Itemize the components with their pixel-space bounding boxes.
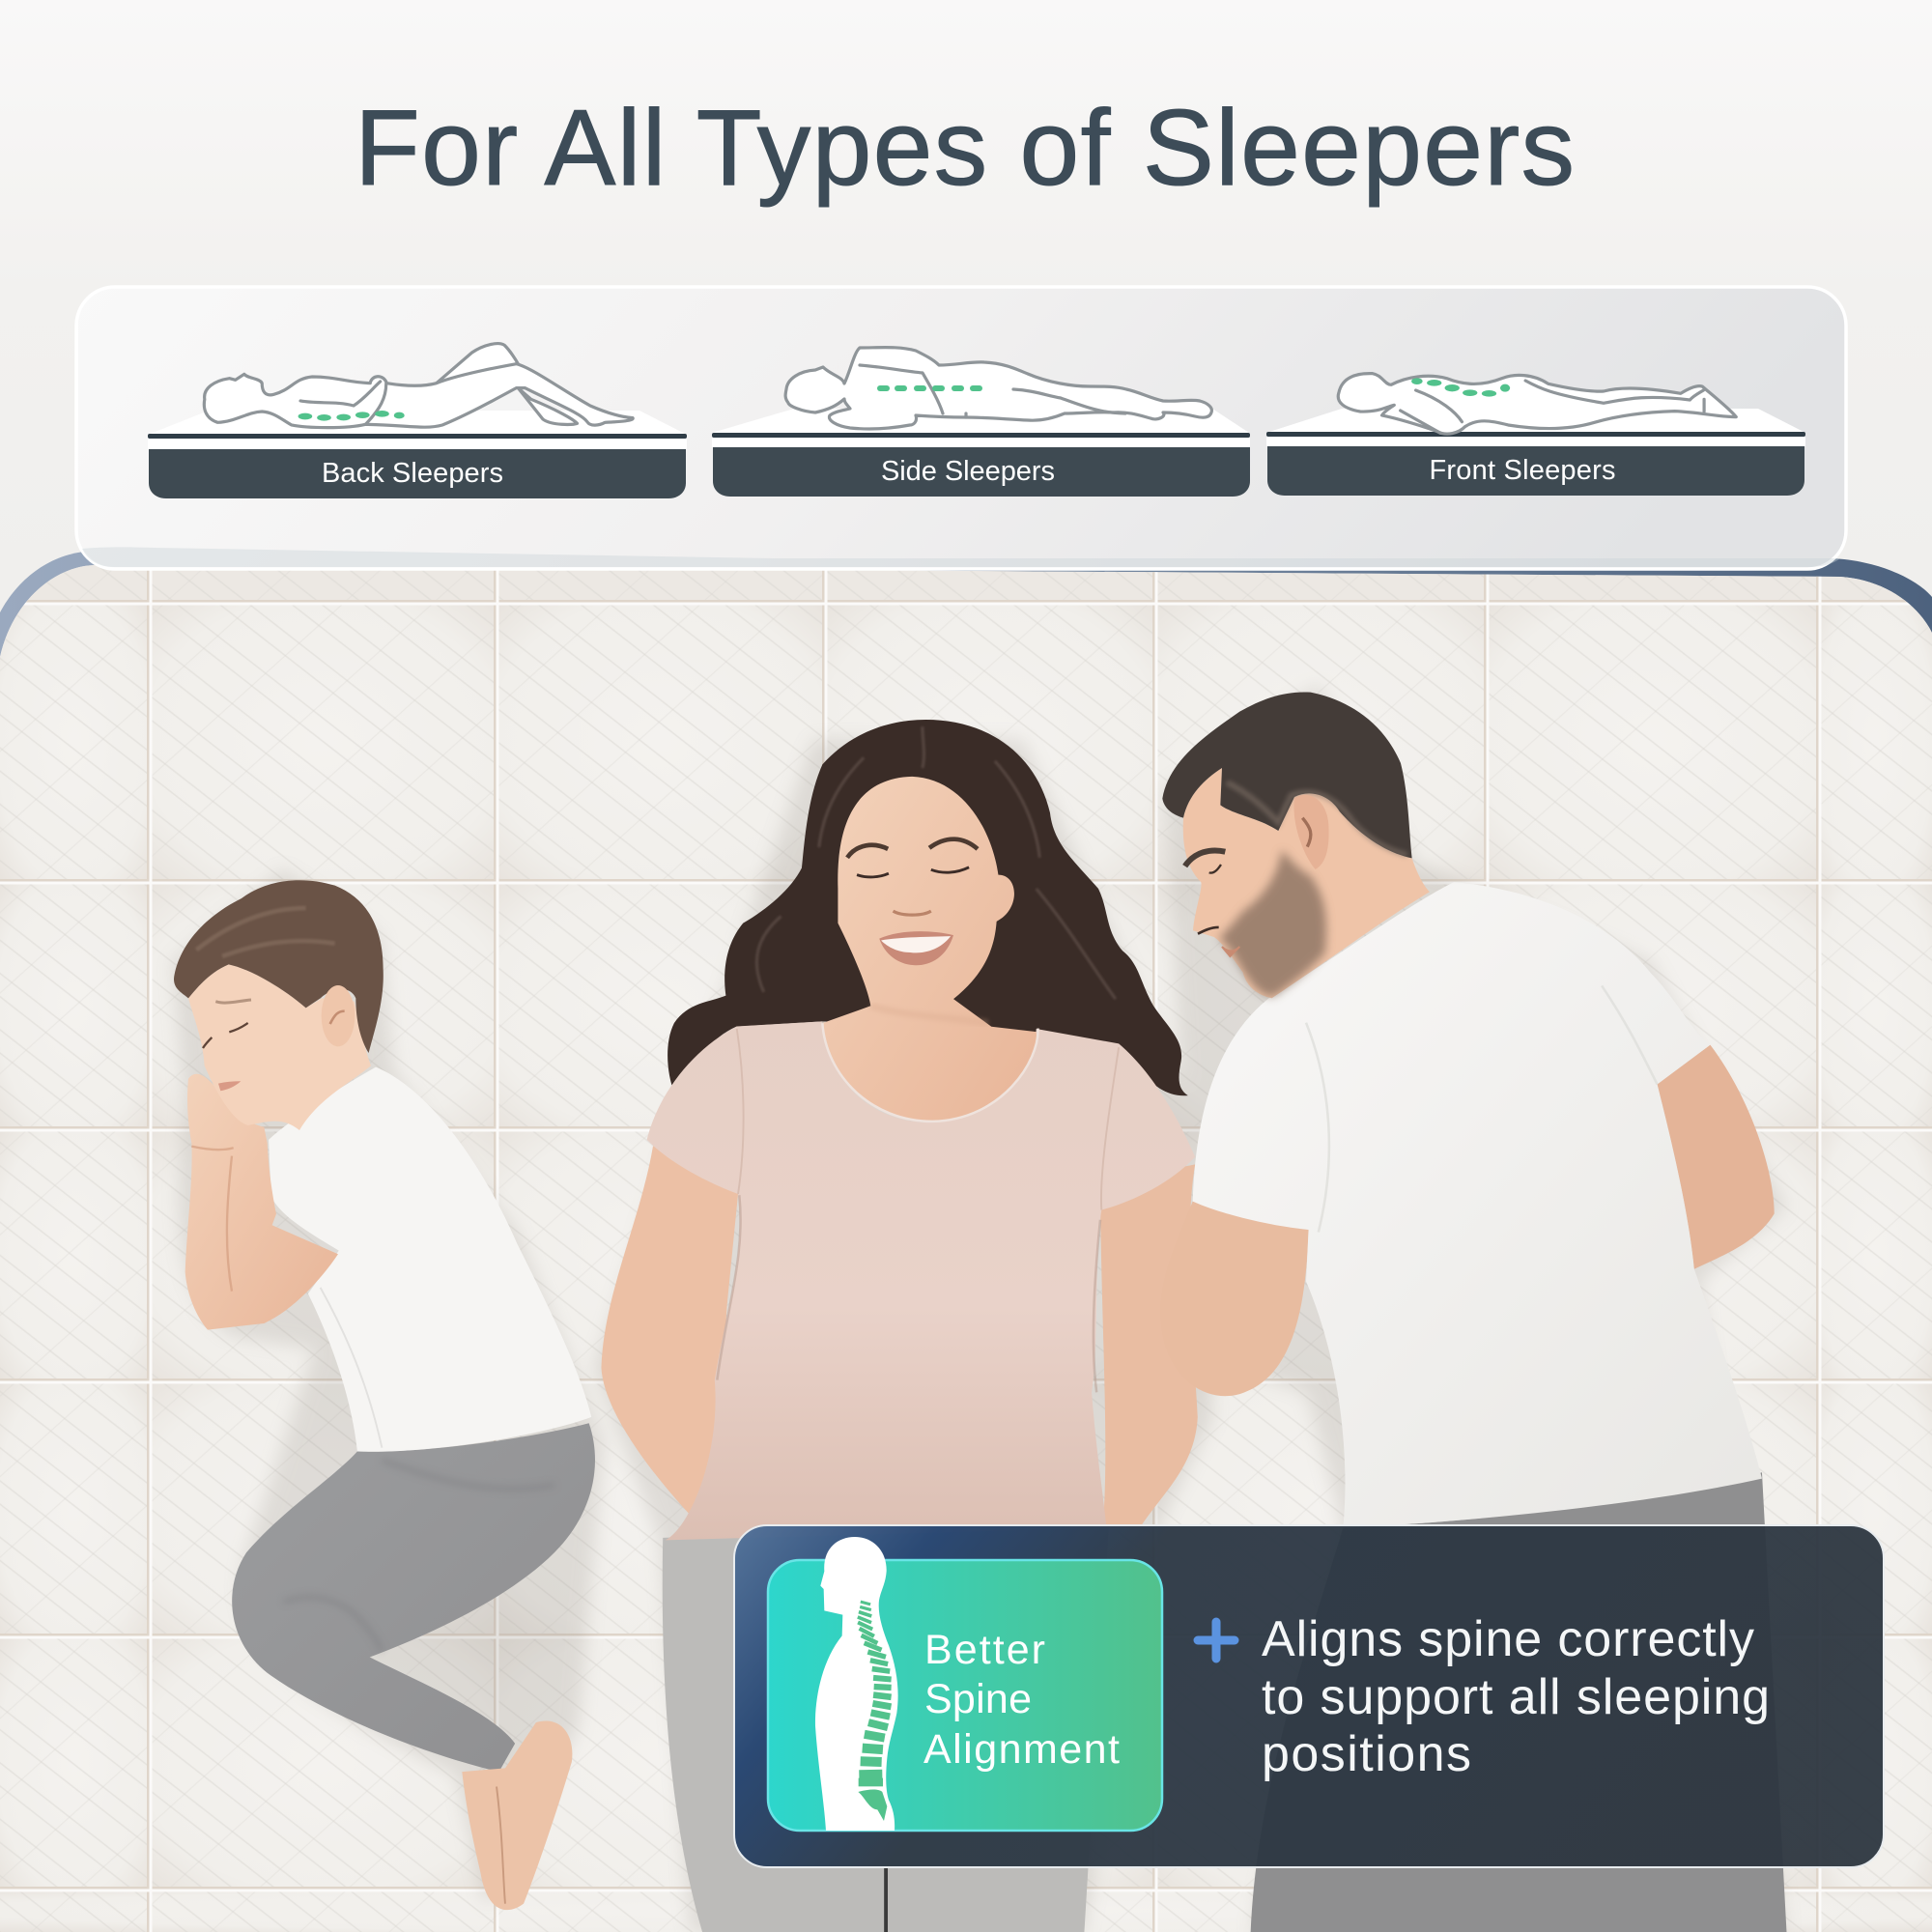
man white t-shirt: [1193, 882, 1762, 1528]
benefit text: to support all sleeping: [1262, 1669, 1770, 1725]
benefit text: positions: [1262, 1726, 1471, 1782]
glass panel background: [76, 287, 1846, 569]
man ear: [1293, 795, 1329, 869]
child hair: [174, 880, 384, 1053]
back mattress top: [148, 411, 687, 435]
child grey trousers: [232, 1423, 595, 1772]
person: man: [1160, 692, 1786, 1932]
woman neck and face: [822, 777, 1037, 1122]
mattress quilted surface: [0, 541, 1932, 1932]
icon: back sleeper body: [204, 344, 633, 428]
icon: human profile with spine: [815, 1537, 898, 1831]
child foot: [462, 1721, 572, 1910]
man beard: [1219, 850, 1326, 997]
front mattress base: [1267, 446, 1804, 496]
front mattress layers: [1266, 432, 1805, 437]
woman neckline trim: [822, 1023, 1038, 1122]
man left arm: [1160, 1202, 1309, 1396]
child neck and face: [188, 964, 371, 1130]
woman left arm: [601, 1146, 774, 1534]
side mattress layers: [712, 433, 1250, 438]
child closed eye and mouth: [203, 1023, 248, 1048]
woman brows, eyes, nose: [847, 839, 978, 858]
label: side sleepers: Side Sleepers: [881, 456, 1055, 487]
person: child: [174, 880, 595, 1910]
label: back sleepers: Back Sleepers: [322, 458, 503, 489]
sleeper: side: [712, 348, 1250, 497]
badge text: Spine: [924, 1676, 1032, 1722]
child folded arm and hand: [185, 1074, 338, 1330]
woman hair: [668, 720, 1188, 1095]
woman grey trousers: [663, 1525, 1109, 1932]
man face and neck: [1183, 768, 1430, 998]
panel: spine alignment callout: [734, 1525, 1884, 1867]
man hair: [1162, 692, 1412, 858]
dark panel background: [734, 1525, 1884, 1867]
front mattress top: [1266, 409, 1805, 433]
back mattress layers: [148, 434, 687, 439]
soft contact shadows: [173, 684, 1786, 1932]
badge text: Alignment: [923, 1726, 1120, 1773]
sleeper: back: [148, 344, 687, 498]
person: woman: [601, 720, 1198, 1932]
woman right arm: [1100, 1164, 1198, 1528]
quilt cells: [0, 565, 1932, 1932]
man brow, eye, nose, mouth: [1185, 850, 1225, 867]
woman pink t-shirt: [647, 1021, 1195, 1540]
man right arm: [1658, 1045, 1775, 1269]
badge text: Better: [924, 1627, 1045, 1673]
photo: sleeping family: [173, 684, 1786, 1932]
mattress blue rim: [0, 552, 1932, 667]
side mattress top: [712, 409, 1249, 433]
panel: sleeper positions: [76, 287, 1846, 569]
green badge: [768, 1560, 1162, 1831]
man grey trousers: [1251, 1472, 1786, 1932]
woman smile: [879, 931, 953, 965]
benefit text: Aligns spine correctly: [1262, 1611, 1754, 1667]
icon: side sleeper body: [785, 348, 1211, 429]
back mattress base: [149, 449, 686, 498]
icon: front sleeper body: [1338, 374, 1736, 434]
side mattress base: [713, 447, 1250, 497]
child ear: [322, 985, 355, 1046]
sleeper: front: [1266, 374, 1805, 496]
label: front sleepers: Front Sleepers: [1430, 455, 1615, 486]
icon: plus: [1198, 1622, 1235, 1659]
child t-shirt: [269, 1067, 591, 1452]
title: For All Types of Sleepers: [355, 88, 1575, 208]
